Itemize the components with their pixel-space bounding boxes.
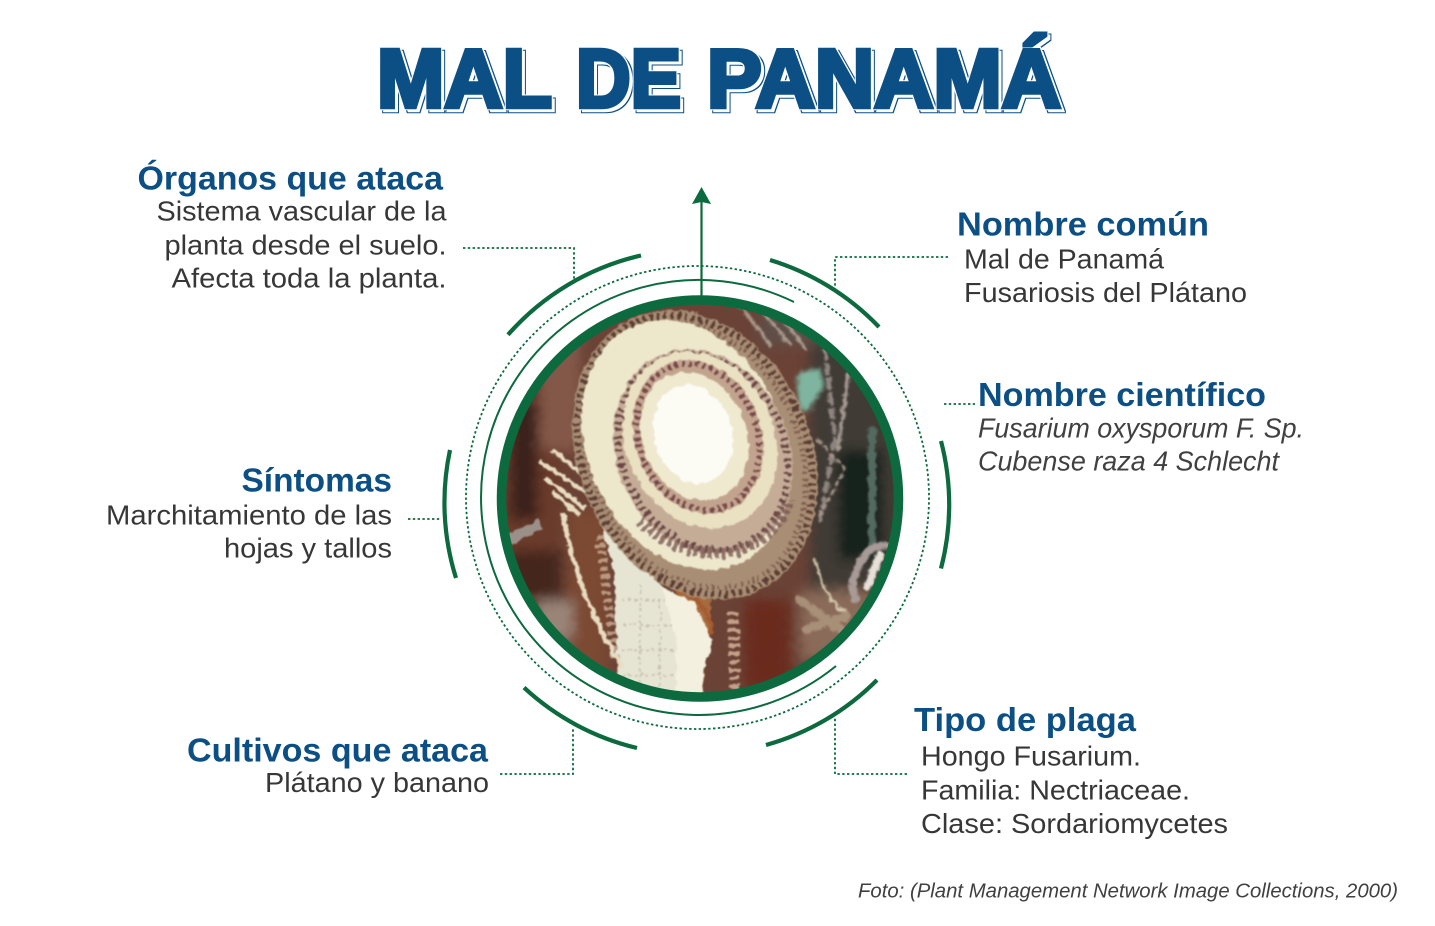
white blob (662, 587, 714, 692)
seams (733, 612, 735, 690)
mint patch (797, 368, 824, 412)
leader (500, 727, 573, 774)
heading: Órganos que ataca (138, 160, 444, 196)
grey stick (509, 524, 540, 541)
white core (652, 382, 734, 486)
panel: organos que ataca (138, 160, 574, 294)
thin ring (481, 280, 836, 715)
heading: Tipo de plaga (914, 701, 1137, 738)
central diagram (444, 187, 949, 748)
rust streak (676, 592, 712, 692)
text block: Fusarium oxysporum F. Sp. (978, 412, 1304, 444)
text block: Plátano y banano (265, 767, 489, 798)
text block: Familia: Nectriaceae. (921, 774, 1190, 806)
text block (978, 412, 1304, 476)
text block: Cubense raza 4 Schlecht (978, 446, 1280, 476)
title: PANAMÁ (707, 32, 1061, 125)
leader (408, 518, 441, 520)
leader (835, 718, 907, 774)
panel: cultivos que ataca (187, 727, 573, 798)
lower dark band (640, 500, 790, 553)
text block: Mal de Panamá (964, 244, 1165, 274)
lower left cream strip (602, 526, 678, 691)
photo ring (502, 300, 898, 697)
title: DE (576, 32, 681, 125)
text block (106, 500, 392, 564)
heading: Cultivos que ataca (187, 732, 489, 768)
photo: banana stem cross-section (506, 304, 894, 692)
text block (156, 196, 447, 294)
arc: left (444, 450, 456, 578)
text block (964, 244, 1247, 308)
stem section (570, 308, 820, 601)
heading: Nombre científico (978, 376, 1266, 413)
photo credit: Foto: (Plant Management Network Image Collections, 2000) (858, 880, 1398, 902)
leader (835, 257, 948, 288)
title (377, 32, 1061, 125)
text block: Hongo Fusarium. (921, 740, 1141, 772)
arc: right (941, 441, 949, 568)
text block: planta desde el suelo. (164, 230, 446, 260)
text block (921, 740, 1228, 839)
panel: nombre cientifico (944, 376, 1304, 476)
text block: hojas y tallos (224, 532, 392, 564)
arrow: upward (692, 187, 711, 298)
arc: lower left (524, 688, 637, 748)
cream fibres on left (540, 450, 622, 668)
text block: Fusariosis del Plátano (964, 277, 1247, 308)
heading: Síntomas (242, 462, 392, 498)
leader (944, 403, 975, 405)
arc: upper right (770, 260, 879, 327)
panel: nombre comun (835, 206, 1247, 308)
arc: lower right (766, 680, 877, 745)
title: MAL (377, 32, 552, 125)
dotted ring (466, 266, 929, 729)
right side bark streaks (740, 305, 888, 640)
text block: Marchitamiento de las (106, 500, 392, 530)
text block: Afecta toda la planta. (172, 262, 446, 294)
panel: sintomas (106, 462, 441, 564)
panel: tipo de plaga (835, 701, 1228, 839)
leader (463, 248, 574, 279)
text block: Clase: Sordariomycetes (921, 808, 1228, 839)
text block: Sistema vascular de la (156, 196, 447, 226)
heading: Nombre común (957, 206, 1209, 242)
arc: upper left (508, 256, 641, 335)
